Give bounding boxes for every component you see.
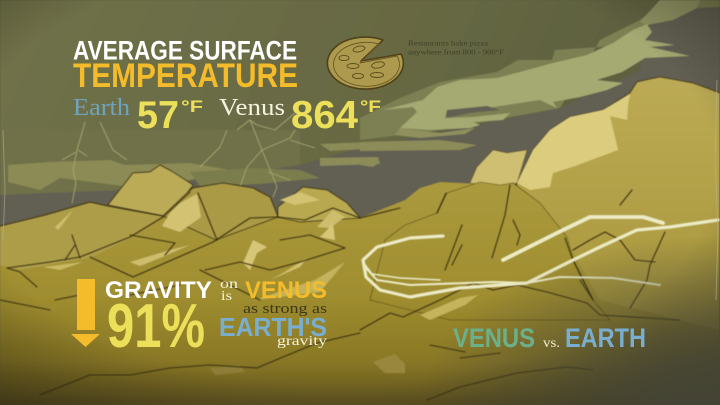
earth temperature: °F bbox=[181, 97, 203, 116]
venus temperature: 864 bbox=[291, 94, 358, 137]
central peak bbox=[370, 182, 610, 320]
gravity callout: GRAVITY bbox=[105, 277, 212, 304]
earth temperature: 57 bbox=[137, 94, 179, 137]
earth temperature bbox=[73, 94, 203, 137]
pizza fact text bbox=[408, 38, 504, 56]
gravity callout: on bbox=[220, 277, 238, 292]
gravity callout: VENUS bbox=[245, 277, 327, 304]
heading: average surface temperature: TEMPERATURE bbox=[73, 57, 298, 95]
white wind streaks bbox=[363, 217, 718, 297]
ridge lines bbox=[0, 185, 680, 400]
foreground ridges bbox=[0, 202, 163, 270]
venus temperature bbox=[219, 94, 381, 137]
peak 2 bbox=[163, 183, 278, 240]
lightning bolts bbox=[62, 113, 315, 203]
boulders bbox=[373, 354, 405, 373]
heading: average surface temperature: AVERAGE SURFACE bbox=[73, 36, 297, 66]
gravity callout bbox=[105, 277, 327, 361]
peak 3 bbox=[278, 187, 360, 222]
gravity down arrow icon bbox=[71, 279, 100, 347]
worn edge texture bbox=[3, 80, 718, 300]
gravity callout: 91% bbox=[107, 292, 205, 361]
gravity callout: as strong as bbox=[243, 301, 327, 317]
heading: average surface temperature bbox=[73, 36, 298, 95]
title: Venus vs. Earth: EARTH bbox=[565, 323, 646, 353]
title: Venus vs. Earth: vs. bbox=[543, 336, 560, 351]
gravity callout: EARTH'S bbox=[219, 312, 327, 342]
venus temperature: °F bbox=[360, 97, 381, 116]
gravity callout: is bbox=[221, 289, 232, 304]
title: Venus vs. Earth: VENUS bbox=[453, 323, 535, 353]
venus temperature: Venus bbox=[219, 95, 285, 121]
peak 1 bbox=[108, 165, 193, 216]
title: Venus vs. Earth bbox=[453, 323, 646, 353]
pizza fact text: anywhere from 800 - 900°F bbox=[408, 48, 504, 56]
earth temperature: Earth bbox=[73, 95, 130, 121]
big right mountain bbox=[470, 77, 720, 330]
ground base bbox=[0, 182, 720, 405]
gravity callout: gravity bbox=[277, 334, 327, 349]
pizza icon bbox=[327, 37, 403, 89]
pizza fact text: Restaurants bake pizza bbox=[408, 38, 489, 48]
